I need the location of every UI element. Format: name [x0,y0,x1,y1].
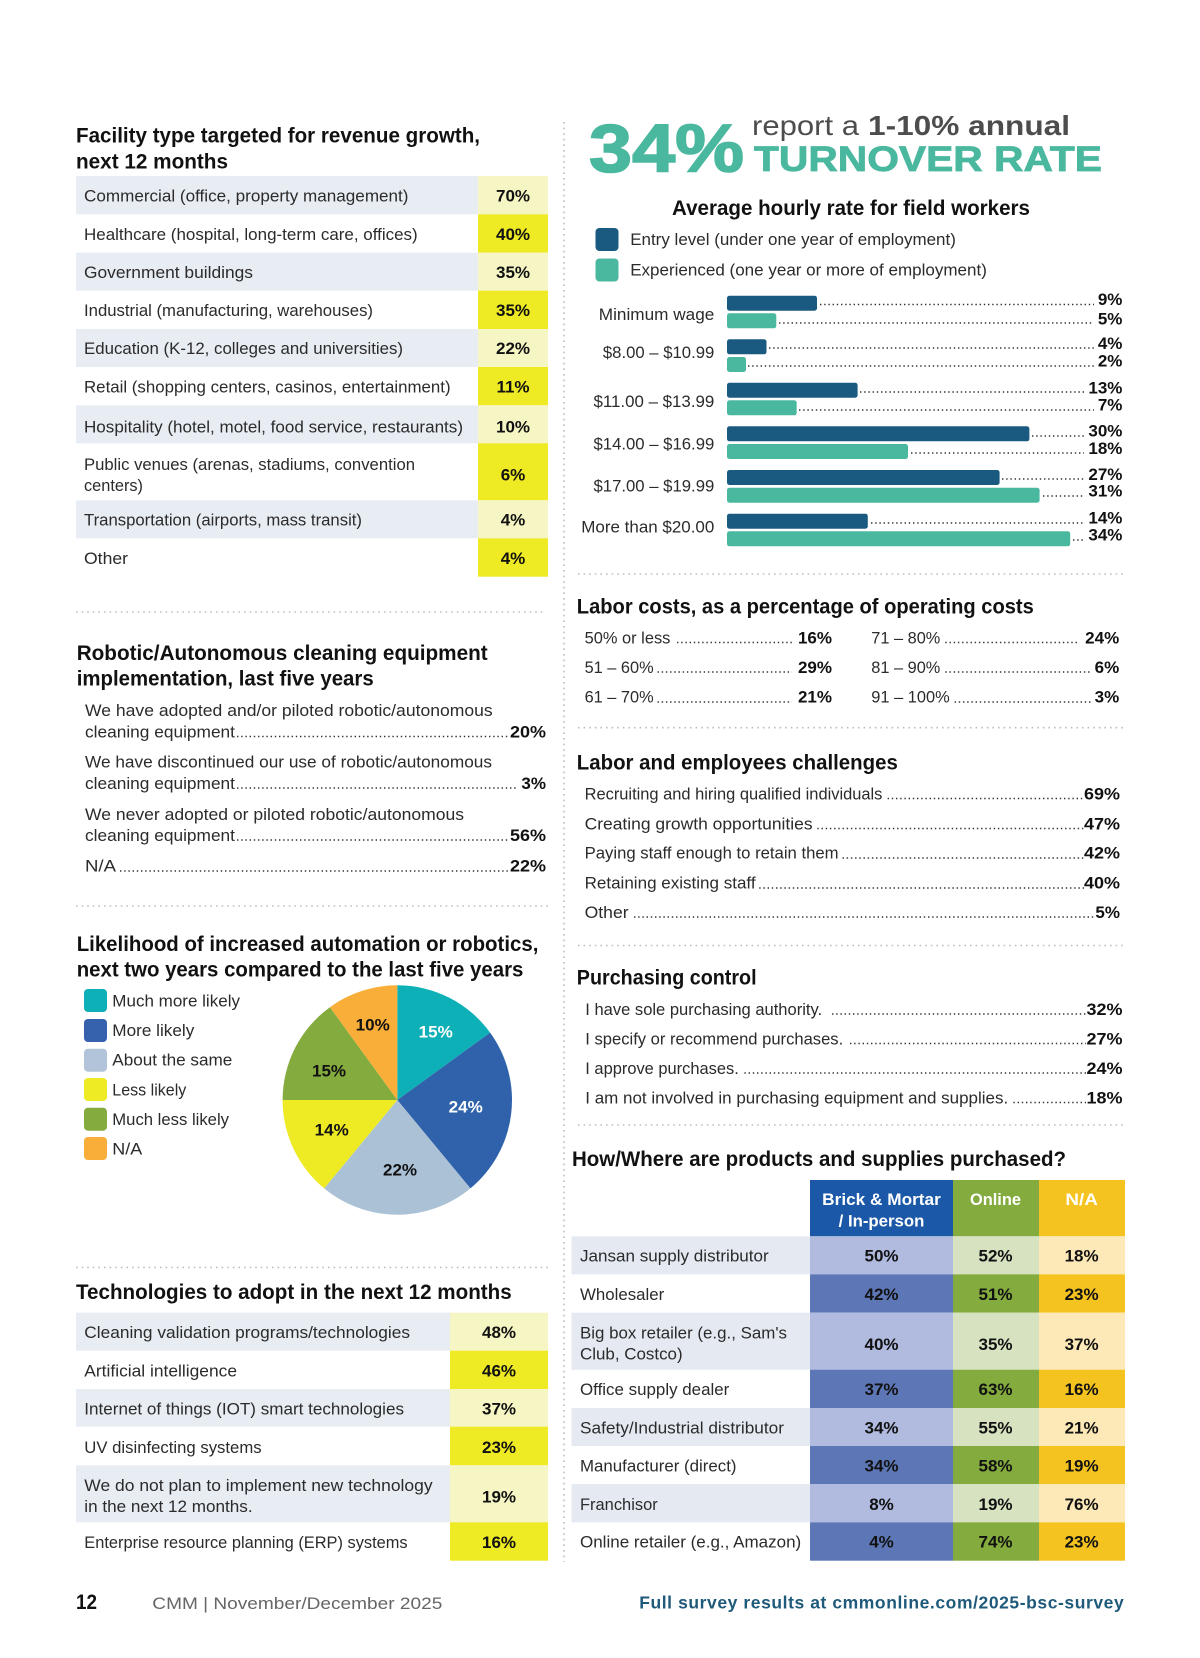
bar group: more than $20.00: 14% [1088,509,1122,528]
row: internet of things: Internet of things (IOT) smart technologies [84,1400,404,1419]
footer: page number and issue: CMM | November/December 2025 [152,1594,442,1613]
row: government: Government buildings [84,263,253,282]
list: purchasing roles: 32% [1086,1000,1122,1019]
bar group: $8.00 to $10.99: 4% [1098,334,1122,353]
row: office supply dealer: 63% [978,1380,1013,1399]
pie chart: 24% [449,1098,483,1117]
list: purchasing roles: I approve purchases. [585,1059,739,1078]
row: big box retailer: Club, Costco) [580,1344,683,1363]
row: hospitality: 10% [496,418,530,437]
row: jansan supply distributor: 18% [1065,1247,1099,1266]
column: upper ranges: 71 – 80% [871,628,940,647]
row: retail: Retail (shopping centers, casinos, entertainment) [84,377,451,396]
pie chart: 10% [356,1016,390,1035]
callout: 34% turnover rate: report a [752,110,859,141]
panel: likelihood of increased automation [77,933,538,1215]
row: UV disinfecting: UV disinfecting systems [84,1438,262,1457]
row: industrial: Industrial (manufacturing, warehouses) [84,301,373,320]
column: lower ranges: 61 – 70% [585,688,654,707]
row: franchisor [572,1484,1125,1522]
bar group: minimum wage: Minimum wage [599,305,714,324]
row: no new technology: 19% [482,1487,516,1506]
bar group: $17.00 to $19.99 [594,465,1122,503]
row: government [76,253,548,291]
row: enterprise resource planning: 16% [482,1533,516,1552]
row: office supply dealer: Office supply dealer [580,1380,730,1399]
bar group: $17.00 to $19.99: 31% [1088,482,1122,501]
row: hospitality [76,405,548,443]
list: challenges: 40% [1084,874,1120,893]
row: jansan supply distributor: Jansan supply distributor [580,1247,769,1266]
heading: purchasing control: Purchasing control [577,966,757,989]
row: jansan supply distributor: 50% [864,1247,899,1266]
row: healthcare: Healthcare (hospital, long-term care, offices) [84,225,418,244]
row: commercial: Commercial (office, property management) [84,187,408,206]
row: big box retailer: 37% [1065,1335,1099,1354]
row: transportation: 4% [501,511,525,530]
bar group: $17.00 to $19.99: 27% [1088,465,1122,484]
row: safety/industrial distributor [572,1408,1125,1446]
row: UV disinfecting: 23% [482,1438,516,1457]
row: other: Other [84,549,128,568]
list: challenges: Retaining existing staff [585,874,756,893]
item: N/A 22%: N/A [85,857,117,876]
row: online retailer: Online retailer (e.g., Amazon) [580,1533,801,1552]
table header: N/A [1065,1190,1098,1209]
callout: 34% turnover rate: TURNOVER RATE [754,140,1102,179]
row: no new technology [76,1465,548,1522]
footer: survey link: Full survey results at cmmonline.com/2025-bsc-survey [639,1592,1124,1612]
row: safety/industrial distributor: 55% [978,1418,1013,1437]
item: discontinued 3% [85,753,546,793]
footer: page number and issue: 12 [76,1591,97,1614]
row: education: Education (K-12, colleges and universities) [84,339,403,358]
table header: Online [970,1190,1021,1209]
row: no new technology: We do not plan to implement new technology [84,1476,433,1495]
legend: N/A [112,1139,143,1158]
heading: facility type [76,125,480,173]
list: purchasing roles: I have sole purchasing authority. [585,1000,822,1019]
heading: hourly rate: Average hourly rate for field workers [672,197,1030,220]
bar group: $11.00 to $13.99: 13% [1088,378,1122,397]
row: commercial: 70% [496,187,530,206]
row: cleaning validation [76,1313,548,1351]
row: wholesaler: 51% [978,1285,1013,1304]
column: lower ranges: 29% [798,658,832,677]
bar group: $11.00 to $13.99: $11.00 – $13.99 [594,392,714,411]
bar group: $8.00 to $10.99: $8.00 – $10.99 [603,343,714,362]
item: adopted 20%: cleaning equipment [85,722,235,741]
row: UV disinfecting [84,1427,548,1465]
callout: 34% turnover rate [589,110,1102,187]
row: internet of things [76,1389,548,1427]
pie chart [283,985,512,1215]
pie chart: 15% [312,1062,346,1081]
heading: how and where: How/Where are products and supplies purchased? [572,1148,1066,1171]
legend [84,989,240,1160]
bar group: $14.00 to $16.99: 18% [1088,439,1122,458]
bar group: $8.00 to $10.99: 2% [1098,352,1122,371]
row: big box retailer: Big box retailer (e.g., Sam's [580,1323,787,1342]
panel: labor costs [577,595,1119,707]
list: challenges: 5% [1095,903,1120,922]
item: never adopted 56% [85,805,546,845]
callout: 34% turnover rate: 34% [589,111,744,187]
item: adopted 20% [85,701,546,741]
heading: labor challenges: Labor and employees challenges [577,751,898,774]
pie chart: 14% [315,1121,349,1140]
bar group: $17.00 to $19.99: $17.00 – $19.99 [594,477,714,496]
list: purchasing roles: I am not involved in purchasing equipment and supplies. [585,1088,1008,1107]
callout: 34% turnover rate: 1-10% annual [868,110,1070,141]
list: purchasing roles: 24% [1086,1059,1122,1078]
row: franchisor: 19% [978,1495,1013,1514]
item: never adopted 56%: cleaning equipment [85,826,235,845]
list: purchasing roles: 27% [1086,1029,1122,1048]
heading: technologies: Technologies to adopt in the next 12 months [76,1281,512,1304]
row: safety/industrial distributor: 34% [864,1418,899,1437]
panel: purchasing control [577,966,1122,1107]
row: healthcare [84,214,548,253]
column: upper ranges [871,628,1119,707]
row: franchisor: 8% [869,1495,894,1514]
table header: Brick & Mortar [822,1190,941,1209]
row: artificial intelligence: 46% [482,1362,516,1381]
row: wholesaler: 42% [864,1285,899,1304]
row: online retailer: 4% [869,1533,894,1552]
footer: page number and issue [76,1591,442,1614]
row: hospitality: Hospitality (hotel, motel, food service, restaurants) [84,418,463,437]
item: discontinued 3%: We have discontinued our use of robotic/autonomous [85,753,492,772]
column: lower ranges: 21% [798,688,832,707]
row: healthcare: 40% [496,225,530,244]
row: big box retailer [572,1313,1125,1370]
list: purchasing roles: 18% [1086,1088,1122,1107]
heading: facility type: next 12 months [76,150,228,173]
list: challenges: Creating growth opportunities [585,814,813,833]
list: challenges: 42% [1084,844,1120,863]
list: challenges: 69% [1084,784,1120,803]
legend: Much less likely [112,1110,229,1129]
row: cleaning validation: Cleaning validation programs/technologies [84,1323,410,1342]
list: challenges: Other [585,903,629,922]
row: manufacturer direct: 34% [864,1457,899,1476]
row: internet of things: 37% [482,1400,516,1419]
row: safety/industrial distributor: 21% [1065,1418,1099,1437]
panel: labor and employees challenges [577,751,1120,922]
item: N/A 22% [85,857,546,876]
bar group: $14.00 to $16.99: 30% [1088,422,1122,441]
heading: robotic implementation: implementation, last five years [77,668,374,690]
row: jansan supply distributor [572,1236,1125,1274]
list: challenges [585,784,1120,922]
row: artificial intelligence: Artificial intelligence [84,1362,237,1381]
row: other: 4% [501,549,525,568]
column: lower ranges: 51 – 60% [585,658,654,677]
row: manufacturer direct: 58% [978,1457,1013,1476]
bar group: minimum wage: 5% [1098,309,1122,328]
legend: More likely [112,1021,195,1040]
row: franchisor: 76% [1065,1495,1099,1514]
row: artificial intelligence [84,1351,548,1389]
panel: facility type targeted for revenue growth [76,125,548,577]
item: never adopted 56%: We never adopted or piloted robotic/autonomous [85,805,464,824]
legend: experience level [596,228,987,282]
column: upper ranges: 91 – 100% [871,688,950,707]
row: transportation [76,500,548,538]
panel: how and where products are purchased [572,1148,1125,1561]
heading: likelihood: next two years compared to the last five years [77,959,523,982]
list: purchasing roles [585,1000,1122,1107]
heading: robotic implementation [77,642,488,690]
row: big box retailer: 40% [864,1335,899,1354]
table header: / In-person [839,1212,924,1231]
bar group: $8.00 to $10.99 [603,334,1122,372]
row: public venues: 6% [501,466,525,485]
bar group: $14.00 to $16.99: $14.00 – $16.99 [594,434,714,453]
legend: experience level: Experienced (one year or more of employment) [630,261,987,280]
pie chart: 15% [419,1022,453,1041]
row: manufacturer direct: Manufacturer (direct) [580,1457,736,1476]
column: lower ranges [585,628,832,707]
bar group: $11.00 to $13.99: 7% [1098,396,1122,415]
panel: technologies to adopt [76,1281,548,1561]
row: public venues [84,443,548,500]
row: wholesaler [580,1274,1125,1313]
row: manufacturer direct: 19% [1065,1457,1099,1476]
pie chart: 22% [383,1161,417,1180]
legend: About the same [112,1051,232,1070]
row: big box retailer: 35% [978,1335,1013,1354]
table header [810,1180,1125,1236]
list: challenges: Paying staff enough to retain them [585,844,839,863]
row: enterprise resource planning: Enterprise resource planning (ERP) systems [84,1533,408,1552]
row: manufacturer direct [580,1446,1125,1484]
item: adopted 20%: We have adopted and/or piloted robotic/autonomous [85,701,493,720]
row: franchisor: Franchisor [580,1495,658,1514]
row: public venues: centers) [84,476,143,495]
row: online retailer [580,1522,1125,1561]
heading: labor costs: Labor costs, as a percentage of operating costs [577,595,1034,618]
row: no new technology: in the next 12 months. [84,1497,253,1516]
item: discontinued 3%: 3% [521,774,546,793]
row: office supply dealer [580,1370,1125,1408]
item: discontinued 3%: cleaning equipment [85,774,235,793]
heading: likelihood: Likelihood of increased automation or robotics, [77,933,538,956]
column: upper ranges: 81 – 90% [871,658,940,677]
row: education [76,329,548,367]
item: N/A 22%: 22% [510,857,546,876]
list: purchasing roles: I specify or recommend purchases. [585,1029,843,1048]
row: safety/industrial distributor: Safety/Industrial distributor [580,1418,784,1437]
bar group: minimum wage: 9% [1098,290,1122,309]
row: office supply dealer: 37% [864,1380,899,1399]
column: lower ranges: 50% or less [585,628,670,647]
row: enterprise resource planning [84,1522,548,1561]
bar group: more than $20.00: 34% [1088,526,1122,545]
item: never adopted 56%: 56% [510,826,546,845]
row: other [84,538,548,577]
item: adopted 20%: 20% [510,722,546,741]
bar group: $14.00 to $16.99 [594,422,1122,459]
row: public venues: Public venues (arenas, stadiums, convention [84,455,415,474]
row: online retailer: 23% [1065,1533,1099,1552]
row: education: 22% [496,339,530,358]
row: transportation: Transportation (airports, mass transit) [84,511,362,530]
panel: average hourly rate for field workers [581,197,1122,546]
row: jansan supply distributor: 52% [978,1247,1013,1266]
column: upper ranges: 6% [1095,658,1119,677]
row: wholesaler: 23% [1065,1285,1099,1304]
legend: Less likely [112,1081,187,1100]
heading: robotic implementation: Robotic/Autonomous cleaning equipment [77,642,488,665]
row: office supply dealer: 16% [1065,1380,1099,1399]
bar group: more than $20.00: More than $20.00 [581,517,714,536]
row: retail: 11% [496,377,530,396]
bar group: $11.00 to $13.99 [594,378,1122,415]
row: government: 35% [496,263,530,282]
row: industrial: 35% [496,301,530,320]
row: commercial [76,176,548,214]
column: lower ranges: 16% [798,628,832,647]
row: online retailer: 74% [978,1533,1013,1552]
list: challenges: Recruiting and hiring qualified individuals [585,784,882,803]
column: upper ranges: 24% [1085,628,1119,647]
heading: likelihood [77,933,538,982]
heading: facility type: Facility type targeted for revenue growth, [76,125,480,148]
panel: robotic equipment implementation [77,642,546,876]
row: cleaning validation: 48% [482,1323,516,1342]
column: upper ranges: 3% [1095,688,1119,707]
bar group: minimum wage [599,290,1122,328]
row: wholesaler: Wholesaler [580,1285,665,1304]
legend: experience level: Entry level (under one year of employment) [630,230,956,249]
row: industrial [84,291,548,329]
list: challenges: 47% [1084,814,1120,833]
row: retail [84,367,548,405]
bar group: more than $20.00 [581,509,1122,546]
legend: Much more likely [112,992,240,1011]
